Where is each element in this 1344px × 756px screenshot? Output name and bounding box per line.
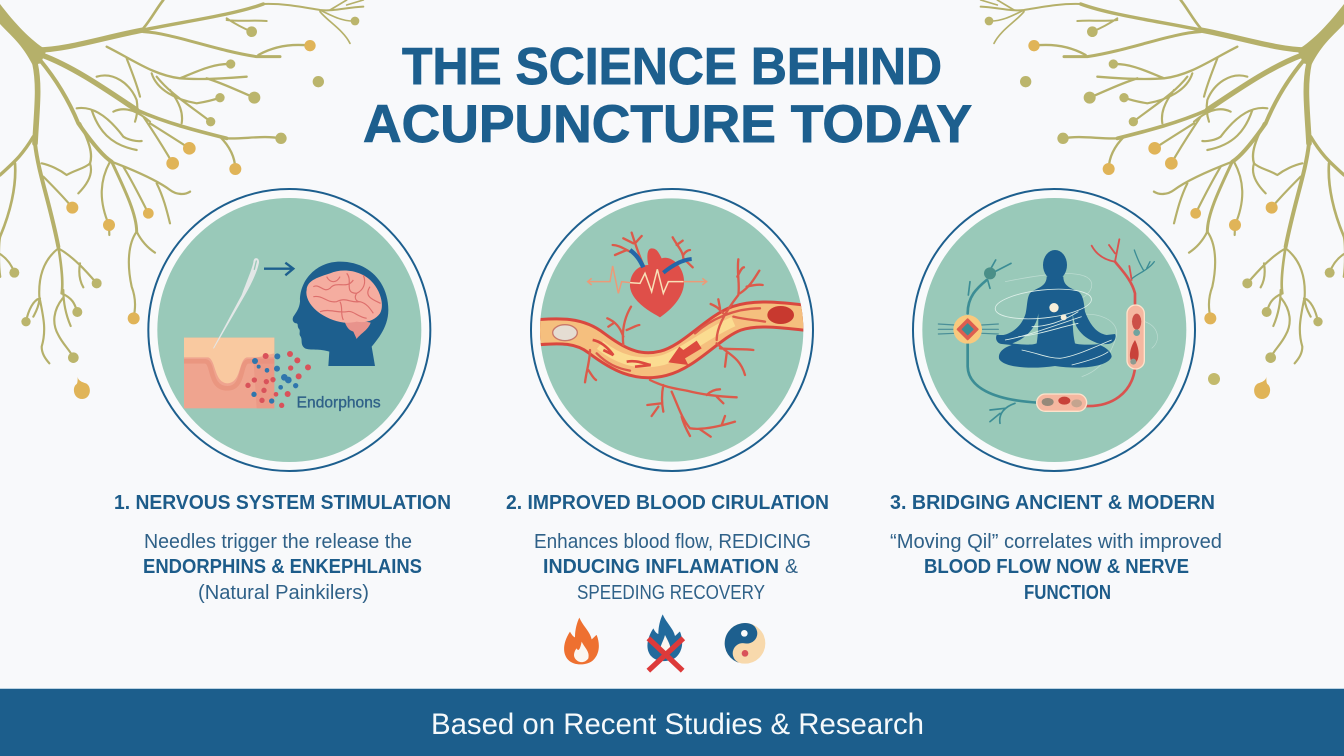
panel: blood circulation illustration [531, 189, 813, 471]
neuron [984, 267, 996, 279]
icon: orange flame [564, 618, 599, 664]
blood vessel [533, 306, 810, 365]
meditating figure [996, 250, 1116, 368]
ECG trace [588, 266, 707, 293]
head silhouette [293, 262, 388, 366]
arrow to brain [264, 263, 293, 275]
horizontal cell capsule [1037, 394, 1087, 411]
body text 1: ENDORPHINS & ENKEPHLAINS [143, 556, 422, 578]
footer text: Based on Recent Studies & Research [431, 708, 924, 741]
qi points [1049, 303, 1067, 320]
body text 2: SPEEDING RECOVERY [577, 582, 765, 604]
faint energy orbits [1005, 274, 1157, 377]
left branching tree [0, 0, 363, 399]
body text 1: (Natural Painkilers) [198, 582, 369, 604]
capillary branches [585, 259, 765, 437]
heading 1: 1. NERVOUS SYSTEM STIMULATION [114, 492, 451, 514]
body text 3 [890, 531, 1222, 604]
body text 1: Needles trigger the release the [144, 531, 412, 553]
nerve pathway [938, 239, 1154, 423]
vertical cell capsule [1127, 305, 1144, 369]
panel: nervous system illustration [148, 189, 430, 471]
endorphons label: Endorphons [297, 395, 381, 412]
acupoint node [953, 315, 982, 344]
body text 3: “Moving Qil” correlates with improved [890, 531, 1222, 553]
icon: yin yang [721, 619, 765, 665]
footer band [0, 688, 1344, 756]
skin cross-section [184, 338, 274, 408]
body text 2: INDUCING INFLAMATION [543, 556, 779, 578]
body text 2: & [785, 556, 799, 578]
qi flow lines [994, 285, 1112, 365]
body text 3: FUNCTION [1024, 582, 1111, 604]
brain [306, 270, 382, 339]
title [363, 38, 972, 154]
body text 1 [143, 531, 422, 604]
endorphin molecules [245, 351, 311, 408]
panel: ancient and modern illustration [913, 189, 1195, 471]
body text 3: BLOOD FLOW NOW & NERVE [924, 556, 1189, 578]
body text 2: Enhances blood flow, REDICING [534, 531, 811, 553]
icon: crossed-out blue flame [647, 614, 683, 671]
flow arrows [593, 340, 702, 367]
title: THE SCIENCE BEHIND [402, 38, 942, 96]
heading 3: 3. BRIDGING ANCIENT & MODERN [890, 492, 1215, 514]
heart [588, 233, 707, 317]
title: ACUPUNCTURE TODAY [363, 95, 972, 154]
needle [213, 258, 259, 348]
body text 2 [534, 531, 811, 604]
right branching tree [981, 0, 1344, 399]
heading 2: 2. IMPROVED BLOOD CIRULATION [506, 492, 829, 514]
